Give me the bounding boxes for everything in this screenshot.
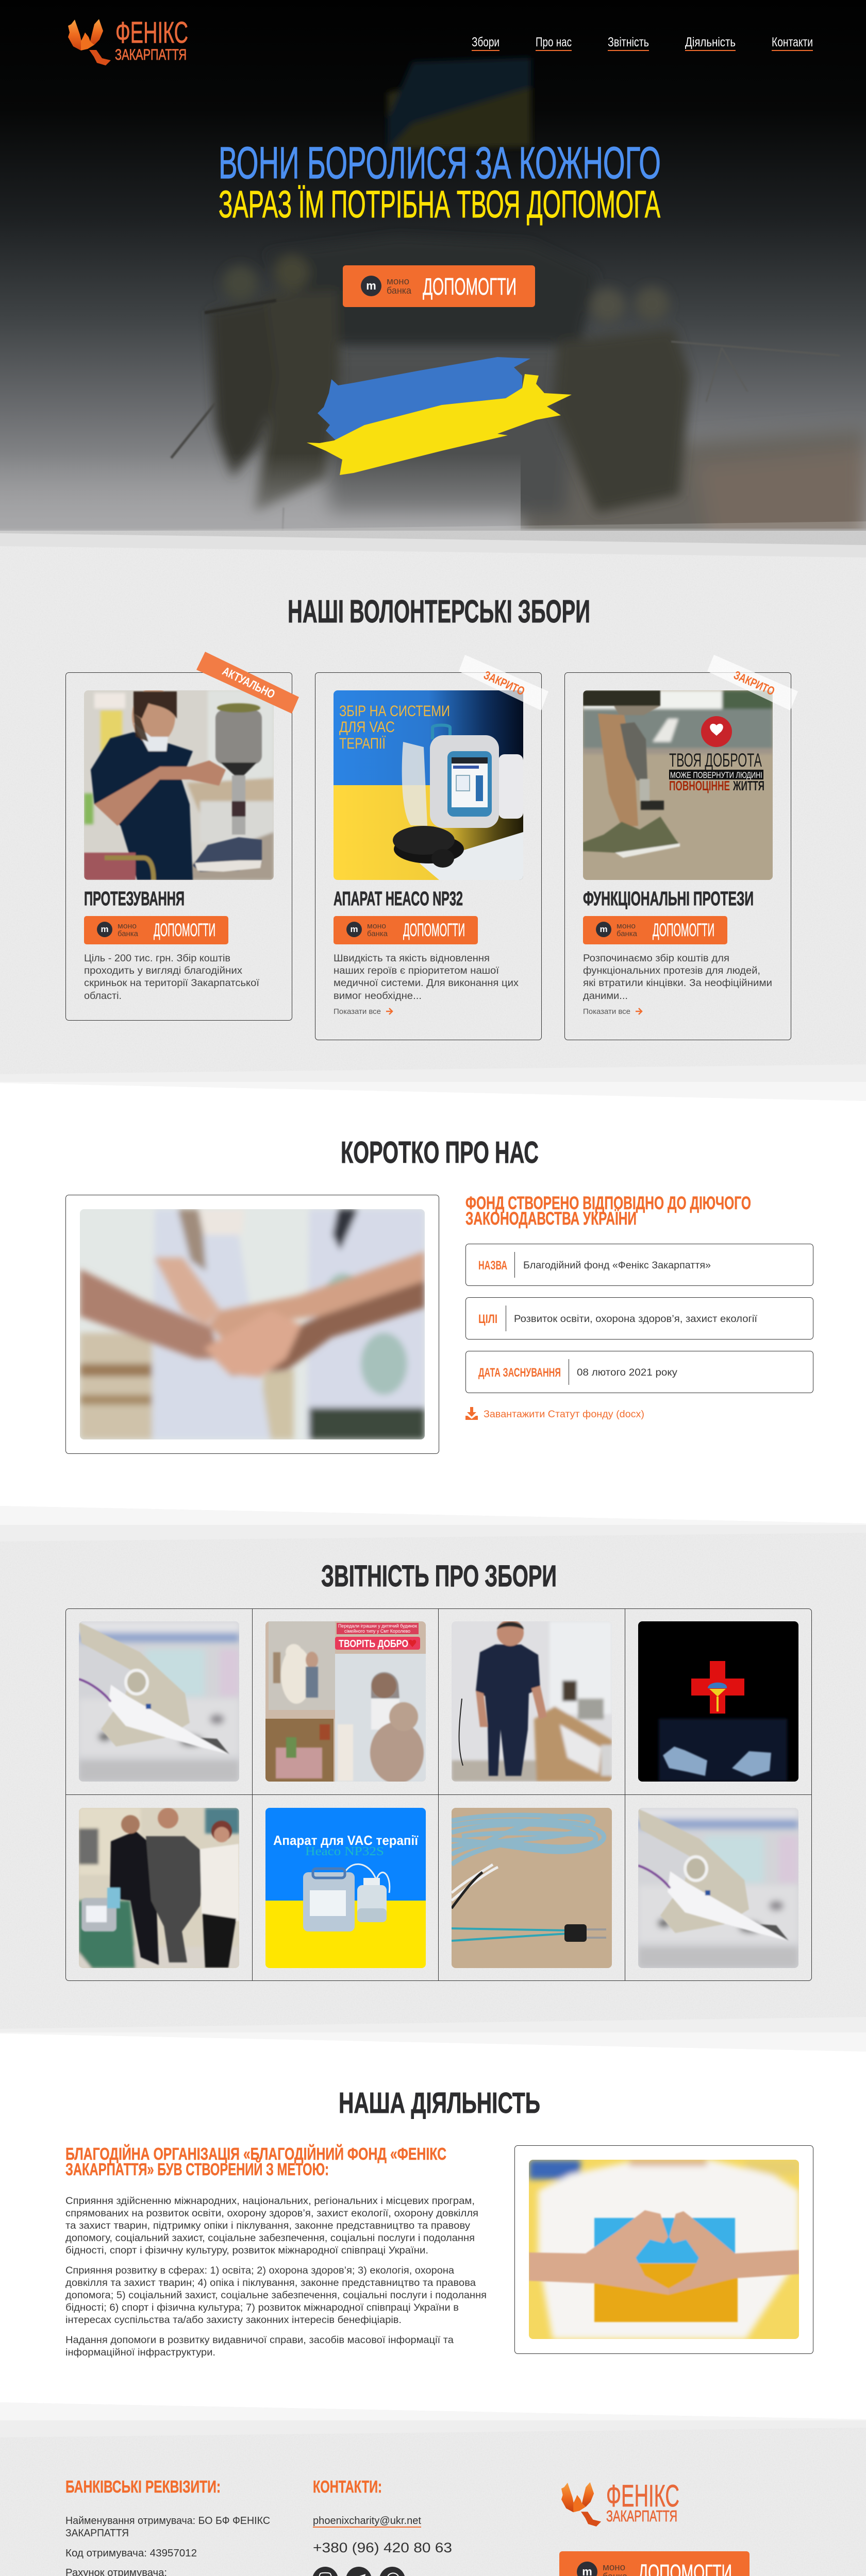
navigation: Про нас xyxy=(536,35,572,49)
card description xyxy=(84,953,260,1002)
navigation: Контакти xyxy=(772,35,813,49)
activities text block xyxy=(65,2196,487,2358)
card: VAC device xyxy=(315,655,548,1040)
donate button xyxy=(84,916,228,944)
activities subheading: БЛАГОДІЙНА ОРГАНІЗАЦІЯ «БЛАГОДІЙНИЙ ФОНД «ФЕНІКС xyxy=(65,2144,446,2163)
footer column: bank details: ЗАКАРПАТТЯ xyxy=(65,2528,129,2539)
hero donate button: m xyxy=(366,279,376,292)
activities text block: інформаційної інфраструктури. xyxy=(65,2347,215,2358)
donate button: ДОПОМОГТИ xyxy=(154,920,215,940)
donate button: m xyxy=(350,924,358,934)
card title: ПРОТЕЗУВАННЯ xyxy=(84,888,185,910)
footer column: contacts xyxy=(312,2477,452,2576)
card description: Ціль - 200 тис. грн. Збір коштів xyxy=(84,953,230,964)
activities text block: допомогу, соціальний захист, соціальне забезпечення, соціальні послуги і подолання xyxy=(65,2233,475,2244)
photo: leg with prosthesis: ПОВНОЦІННЕ xyxy=(669,778,730,793)
footer logo: ЗАКАРПАТТЯ xyxy=(606,2507,677,2525)
photo: teddy bears for orphanage: сімейного типу у Смт Королево xyxy=(344,1629,410,1634)
info row: name: Благодійний фонд «Фенікс Закарпаття» xyxy=(523,1260,711,1271)
icon: whatsapp xyxy=(379,2567,405,2576)
footer column: contacts: phoenixcharity@ukr.net xyxy=(313,2515,421,2527)
photo: man fitting prosthesis xyxy=(84,688,274,880)
panel: about photo frame xyxy=(66,1195,439,1454)
photo: VAC device poster: Heaco NP32S xyxy=(305,1845,384,1858)
ribbon: closed xyxy=(459,655,548,710)
footer donate button: моно xyxy=(603,2562,625,2572)
hero donate button: банка xyxy=(387,285,412,296)
activities subheading xyxy=(65,2144,446,2179)
photo: leg with prosthesis: МОЖЕ ПОВЕРНУТИ ЛЮДИНІ xyxy=(670,770,762,780)
logo xyxy=(68,16,188,65)
activities text block: інтересах суспільства та/або захисту законних інтересів бенефіціарів. xyxy=(65,2315,402,2326)
photo: VAC therapy poster: ДЛЯ VAC xyxy=(339,719,395,736)
hero section xyxy=(0,0,866,546)
photo: patient and medical staff xyxy=(79,1808,239,1968)
photo: medical cross on black xyxy=(638,1621,798,1782)
footer column: bank details: БАНКІВСЬКІ РЕКВІЗИТИ: xyxy=(65,2477,221,2496)
heading: our activities: НАША ДІЯЛЬНІСТЬ xyxy=(339,2087,540,2120)
card: functional prostheses xyxy=(565,655,798,1040)
section background: volunteer fundraisers xyxy=(0,531,866,1105)
card description: області. xyxy=(84,991,122,1002)
footer logo xyxy=(561,2479,679,2527)
activities subheading: ЗАКАРПАТТЯ» БУВ СТВОРЕНИЙ З МЕТОЮ: xyxy=(65,2159,329,2179)
section background: reports xyxy=(0,1504,866,2056)
donate button: банка xyxy=(367,929,388,938)
card description: Швидкість та якість відновлення xyxy=(334,953,490,964)
card title: АПАРАТ HEACO NP32 xyxy=(334,888,463,910)
footer column: bank details xyxy=(65,2477,270,2576)
photo: VAC device poster: Апарат для VAC терапії xyxy=(273,1833,419,1848)
footer column: contacts: КОНТАКТИ: xyxy=(313,2477,382,2496)
activities text block: спрямованих на розвиток освіти, охорону здоров’я, захист екології, охорону довкілля xyxy=(65,2208,478,2219)
card description: які втратили кінцівки. За неофіційними xyxy=(583,978,772,989)
donate button: банка xyxy=(617,929,638,938)
ribbon: closed xyxy=(707,655,798,710)
card description: проходить у вигляді благодійних xyxy=(84,965,243,976)
photo: leg with prosthesis: ЖИТТЯ xyxy=(732,778,764,793)
info row: goals: Розвиток освіти, охорона здоров’я, захист екології xyxy=(514,1314,758,1325)
photo: teddy bears for orphanage xyxy=(265,1621,426,1784)
donate button: m xyxy=(101,924,109,934)
donate button: ДОПОМОГТИ xyxy=(403,920,465,940)
activities text block: довкілля та захист тварин; 4) опіка і піклування, законне представництво та правова xyxy=(65,2278,476,2289)
hero sliver above section edge xyxy=(0,529,866,545)
card description: наших героїв є пріоритетом нашої xyxy=(334,965,499,976)
photo: teddy bears for orphanage: Передали іграшки у дитячий будинок xyxy=(338,1623,417,1629)
card: prosthetics xyxy=(66,652,299,1020)
activities text block: бідності, спорт і фізичну культуру, розвиток міжнародної співпраці України. xyxy=(65,2245,428,2256)
donate button: моно xyxy=(118,922,137,930)
photo: doctor with boxes xyxy=(452,1619,612,1782)
about subheading: ЗАКОНОДАВСТВА УКРАЇНИ xyxy=(465,1209,637,1229)
about subheading xyxy=(465,1193,751,1229)
footer logo: ФЕНІКС xyxy=(606,2479,679,2513)
ribbon: active: АКТУАЛЬНО xyxy=(220,664,277,701)
photo: VAC device poster xyxy=(265,1808,426,1968)
footer background xyxy=(0,2401,866,2576)
donate button: ДОПОМОГТИ xyxy=(653,920,714,940)
donate button: банка xyxy=(118,929,139,938)
activities text block: Надання допомоги в розвитку видавничої справи, засобів масової інформації та xyxy=(65,2335,454,2346)
card description xyxy=(334,953,519,1002)
photo: blue electrosurgical cable xyxy=(452,1808,612,1968)
heading: reports: ЗВІТНІСТЬ ПРО ЗБОРИ xyxy=(321,1560,557,1593)
info row: founding date: ДАТА ЗАСНУВАННЯ xyxy=(478,1366,561,1380)
show more link: Показати все xyxy=(334,1007,381,1016)
footer column: bank details: Найменування отримувача: БО БФ ФЕНІКС xyxy=(65,2515,270,2527)
photo: teddy bears for orphanage: ТВОРІТЬ ДОБРО xyxy=(339,1638,408,1650)
card description xyxy=(583,953,772,1002)
card description: вимог необхідне... xyxy=(334,991,422,1002)
card description: функціональних протезів для людей, xyxy=(583,965,760,976)
photo: VAC therapy poster: ТЕРАПІЇ xyxy=(339,735,386,752)
info row: founding date: 08 лютого 2021 року xyxy=(577,1367,678,1378)
info row: name: НАЗВА xyxy=(478,1259,507,1273)
donate button: моно xyxy=(617,922,636,930)
info row: name xyxy=(466,1244,813,1286)
icon: Ukrainian flag brush stroke xyxy=(307,357,572,475)
photo: surgical tool xyxy=(638,1808,798,1968)
navigation: Збори xyxy=(472,35,499,49)
photo: surgical tool xyxy=(79,1621,239,1782)
icon: viber xyxy=(312,2567,338,2576)
hero donate button: моно xyxy=(387,276,409,286)
heading: about us: КОРОТКО ПРО НАС xyxy=(341,1136,539,1170)
photo: hands forming heart xyxy=(529,2160,799,2339)
logo: ЗАКАРПАТТЯ xyxy=(115,46,187,63)
photo: leg with prosthesis xyxy=(583,690,773,880)
donate button: моно xyxy=(367,922,386,930)
card title: ФУНКЦІОНАЛЬНІ ПРОТЕЗИ xyxy=(583,888,754,910)
photo: VAC therapy poster xyxy=(334,690,523,880)
donate button xyxy=(583,916,727,944)
ribbon: closed: ЗАКРИТО xyxy=(732,668,777,698)
panel: activities photo frame xyxy=(514,2145,813,2353)
info row: goals: ЦІЛІ xyxy=(478,1312,497,1326)
card description: медичної системи. Для виконання цих xyxy=(334,978,519,989)
donate button: m xyxy=(599,924,608,934)
activities text block: та захист тварин, підтримку опіки і піклування, законне представництво та правову xyxy=(65,2221,471,2231)
hero background photo: soldiers in fog xyxy=(0,0,866,546)
footer column: bank details: Код отримувача: 43957012 xyxy=(65,2548,197,2559)
panel: report gallery xyxy=(66,1608,811,1980)
ribbon: closed: ЗАКРИТО xyxy=(482,668,527,698)
activities text block: допомога; 5) соціальний захист, соціальне забезпечення, соціальні послуги і подолання xyxy=(65,2290,487,2301)
navigation xyxy=(472,35,813,51)
navigation: Звітність xyxy=(608,35,649,49)
heading: volunteer fundraisers: НАШІ ВОЛОНТЕРСЬКІ ЗБОРИ xyxy=(288,594,590,630)
footer donate button xyxy=(559,2551,750,2576)
info row: goals xyxy=(466,1297,813,1340)
activities text block: Сприяння розвитку в сферах: 1) освіта; 2) охорона здоров’я; 3) екологія, охорона xyxy=(65,2265,454,2276)
navigation: Діяльність xyxy=(685,35,736,49)
activities text block: Сприяння здійсненню міжнародних, національних, регіональних і місцевих програм, xyxy=(65,2196,475,2207)
show more link: Показати все xyxy=(583,1007,630,1016)
logo: ФЕНІКС xyxy=(115,16,188,49)
ribbon: active xyxy=(196,652,299,714)
footer column: contacts: +380 (96) 420 80 63 xyxy=(313,2540,452,2555)
info row: founding date xyxy=(466,1351,813,1393)
icon: telegram xyxy=(346,2567,372,2576)
card description: даними... xyxy=(583,991,628,1002)
photo: stacked hands xyxy=(80,1209,425,1439)
photo: VAC therapy poster: ЗБІР НА СИСТЕМИ xyxy=(339,703,450,720)
about subheading: ФОНД СТВОРЕНО ВІДПОВІДНО ДО ДІЮЧОГО xyxy=(465,1193,751,1213)
hero donate button: ДОПОМОГТИ xyxy=(423,273,517,300)
activities text block: бідності; 6) спорт і фізична культура; 7) розвиток міжнародної співпраці України в xyxy=(65,2302,459,2313)
card description: скриньок на території Закарпатської xyxy=(84,978,260,989)
photo: leg with prosthesis: ТВОЯ ДОБРОТА xyxy=(669,750,762,771)
card description: Розпочинаємо збір коштів для xyxy=(583,953,729,964)
donate button xyxy=(334,916,478,944)
download link: Завантажити Статут фонду (docx) xyxy=(484,1409,644,1420)
hero donate button xyxy=(343,265,535,307)
